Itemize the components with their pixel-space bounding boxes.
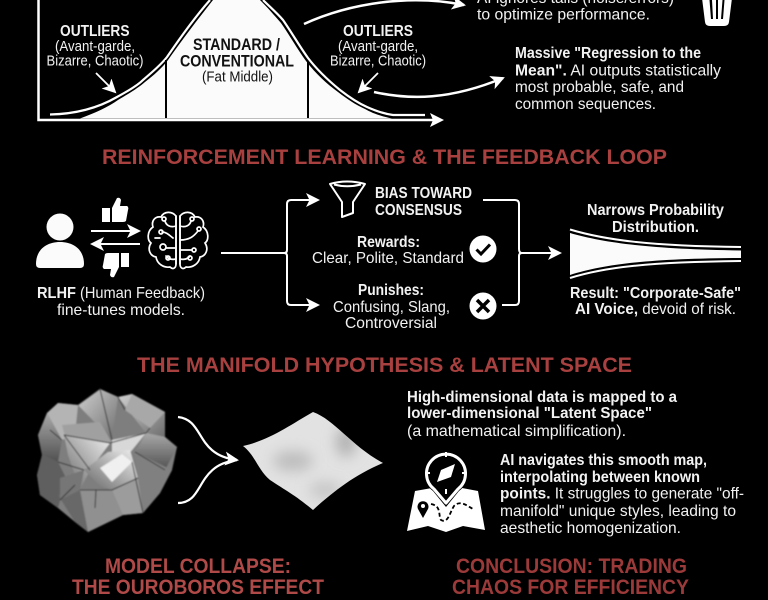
label: right outliers: Bizarre, Chaotic) xyxy=(330,54,426,70)
label: standard conventional: STANDARD / xyxy=(193,36,280,54)
text: corporate safe xyxy=(570,285,741,318)
text: manifold navigation xyxy=(500,452,744,537)
text: punishes xyxy=(333,282,450,332)
section dividers xyxy=(166,60,308,118)
icon: trash can xyxy=(702,0,732,26)
heading: manifold hypothesis: THE MANIFOLD HYPOTHESIS & LATENT SPACE xyxy=(137,354,632,377)
label: left outliers: Bizarre, Chaotic) xyxy=(46,54,144,70)
icon: brain xyxy=(148,212,208,268)
text: AI ignores tails: to optimize performance. xyxy=(477,6,650,24)
text: narrows distribution: Narrows Probability xyxy=(587,202,724,219)
arrow: left outlier pointer xyxy=(96,73,115,92)
distribution fill xyxy=(80,0,392,118)
arrows: mapping to latent space xyxy=(178,417,237,503)
text: latent space intro: lower-dimensional "Latent Space" xyxy=(407,405,652,422)
arrow: right outlier pointer xyxy=(359,73,378,92)
text: manifold navigation: points. It struggles to generate "off- xyxy=(500,486,744,502)
text: rewards: Clear, Polite, Standard xyxy=(312,250,464,267)
text: bias toward consensus: BIAS TOWARD xyxy=(375,185,472,202)
icon: check xyxy=(470,236,496,262)
text: bias toward consensus xyxy=(375,185,472,219)
icon: funnel xyxy=(330,182,365,217)
label: standard conventional xyxy=(180,36,294,86)
icon: cross xyxy=(470,292,496,320)
text: regression to the mean xyxy=(515,45,721,113)
arrow: outliers to regression xyxy=(374,78,503,97)
text: manifold navigation: interpolating between known xyxy=(500,469,700,486)
illustration: smooth latent surface xyxy=(243,412,383,510)
text: regression to the mean: Massive "Regression to the xyxy=(515,45,701,62)
text: corporate safe: Result: "Corporate-Safe" xyxy=(570,285,741,302)
text: regression to the mean: Mean". AI outputs statistically xyxy=(515,62,721,80)
heading: model collapse: THE OUROBOROS EFFECT xyxy=(72,576,324,599)
label: right outliers xyxy=(330,23,426,70)
heading: model collapse xyxy=(72,555,324,599)
arrows: feedback exchange xyxy=(91,231,140,244)
text: manifold navigation: AI navigates this smooth map, xyxy=(500,452,707,469)
label: right outliers: OUTLIERS xyxy=(343,23,413,40)
text: latent space intro: (a mathematical simplification). xyxy=(407,423,626,440)
bell curve chart xyxy=(38,0,444,127)
label: standard conventional: (Fat Middle) xyxy=(202,70,273,86)
icon: narrowing horn xyxy=(570,230,741,278)
icon: compass map xyxy=(407,451,485,532)
arrow: tails to ignored xyxy=(304,0,464,24)
arrow: merge bracket xyxy=(483,200,560,305)
text: AI ignores tails xyxy=(477,0,674,24)
text: latent space intro xyxy=(407,389,677,440)
distribution outline xyxy=(50,0,425,115)
icon: thumbs up xyxy=(102,198,128,222)
text: RLHF: RLHF (Human Feedback) xyxy=(37,285,205,302)
text: punishes: Confusing, Slang, xyxy=(333,299,450,316)
chart axes xyxy=(38,0,444,127)
text: rewards xyxy=(312,234,464,267)
text: manifold navigation: aesthetic homogenization. xyxy=(500,520,681,537)
heading: model collapse: MODEL COLLAPSE: xyxy=(105,555,291,578)
text: latent space intro: High-dimensional data is mapped to a xyxy=(407,389,677,406)
text: narrows distribution xyxy=(587,202,724,236)
text: bias toward consensus: CONSENSUS xyxy=(375,202,462,219)
text: corporate safe: AI Voice, devoid of risk. xyxy=(575,301,736,318)
text: narrows distribution: Distribution. xyxy=(612,219,699,236)
text: RLHF: fine-tunes models. xyxy=(57,302,185,319)
text: RLHF xyxy=(37,285,205,319)
heading: reinforcement learning: REINFORCEMENT LEARNING & THE FEEDBACK LOOP xyxy=(102,146,667,169)
heading: conclusion: CONCLUSION: TRADING xyxy=(456,555,687,578)
text: regression to the mean: most probable, safe, and xyxy=(515,79,684,96)
label: left outliers: OUTLIERS xyxy=(60,23,130,40)
label: left outliers xyxy=(46,23,144,70)
icon: person xyxy=(36,214,84,268)
icon: thumbs down xyxy=(103,253,129,277)
text: punishes: Controversial xyxy=(345,315,437,332)
arrows: split bracket xyxy=(221,200,318,305)
heading: conclusion xyxy=(452,555,689,599)
text: regression to the mean: common sequences. xyxy=(515,96,656,113)
text: manifold navigation: manifold" unique styles, leading to xyxy=(500,503,736,520)
text: punishes: Punishes: xyxy=(358,282,424,299)
label: standard conventional: CONVENTIONAL xyxy=(180,52,294,70)
illustration: crumpled high-dimensional ball xyxy=(37,389,177,532)
label: right outliers: (Avant-garde, xyxy=(338,39,418,55)
text: rewards: Rewards: xyxy=(357,234,420,251)
label: left outliers: (Avant-garde, xyxy=(55,39,135,55)
heading: conclusion: CHAOS FOR EFFICIENCY xyxy=(452,576,689,599)
